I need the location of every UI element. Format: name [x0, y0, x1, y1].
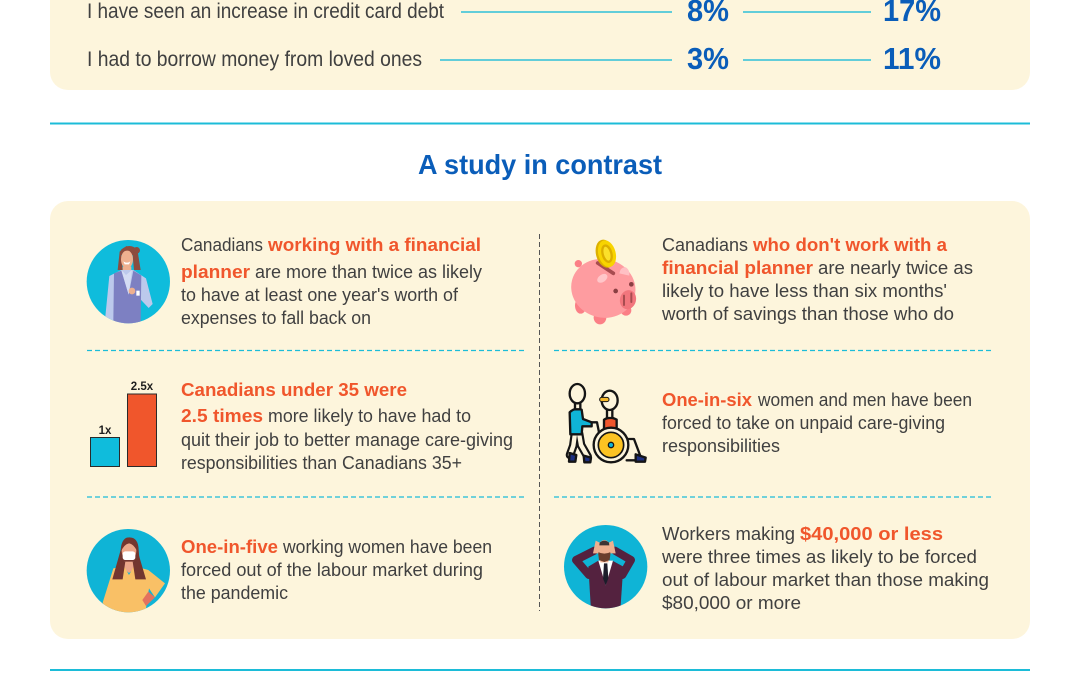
text: Canadians under 35: more likely to have had to — [268, 406, 471, 426]
text: Canadians under 35: quit their job to better manage care-giving — [181, 430, 513, 450]
text: workers making $40,000 or less — [661, 524, 989, 613]
survey row: borrowed from loved ones: I had to borrow money from loved ones — [87, 47, 422, 71]
icon: caregiver pushing wheelchair — [569, 384, 646, 462]
text: one-in-six caregivers: forced to take on unpaid care-giving — [662, 413, 945, 433]
text: who don't work with a financial planner: financial planner — [662, 258, 813, 278]
text: who don't work with a financial planner: who don't work with a — [752, 235, 948, 255]
text: who don't work with a financial planner — [661, 235, 973, 324]
icon: financial planner woman — [87, 240, 170, 324]
survey row: borrowed from loved ones — [87, 41, 941, 76]
text: one-in-six caregivers: responsibilities — [662, 436, 780, 456]
text: who don't work with a financial planner: worth of savings than those who do — [661, 304, 954, 324]
text: working with a financial planner — [181, 235, 482, 328]
text: Canadians under 35: responsibilities than Canadians 35+ — [181, 453, 462, 473]
chart: 1x versus 2.5x bars — [90, 381, 156, 466]
text: Canadians under 35 — [181, 380, 513, 473]
text: workers making $40,000 or less: Workers making — [662, 524, 795, 544]
text: one-in-five working women: working women have been — [282, 537, 492, 557]
text: workers making $40,000 or less: were three times as likely to be forced — [661, 547, 977, 567]
heading: A study in contrast: A study in contrast — [418, 149, 662, 180]
text: one-in-six caregivers: women and men have been — [757, 390, 972, 410]
chart: 1x versus 2.5x bars: 2.5x — [131, 381, 154, 393]
text: working with a financial planner: planner — [181, 262, 250, 282]
text: working with a financial planner: working with a financial — [267, 235, 481, 255]
text: workers making $40,000 or less: out of labour market than those making — [662, 570, 989, 590]
icon: woman wearing mask — [87, 529, 170, 615]
text: working with a financial planner: are more than twice as likely — [255, 262, 482, 282]
text: working with a financial planner: to have at least one year's worth of — [181, 285, 459, 305]
icon: stressed man in suit — [564, 525, 647, 610]
text: workers making $40,000 or less: $40,000 or less — [800, 524, 943, 544]
text: working with a financial planner: Canadians — [181, 235, 263, 255]
panel: study in contrast — [50, 201, 1030, 639]
text: Canadians under 35: Canadians under 35 were — [181, 380, 407, 400]
chart: 1x versus 2.5x bars: 1x — [99, 425, 112, 437]
icon: piggy bank with coin — [565, 237, 642, 325]
panel: debt survey results — [50, 0, 1030, 90]
survey row: borrowed from loved ones: 3% — [687, 41, 729, 76]
text: workers making $40,000 or less: $80,000 or more — [662, 593, 801, 613]
text: who don't work with a financial planner: are nearly twice as — [818, 258, 973, 278]
text: one-in-five working women: forced out of the labour market during — [181, 560, 483, 580]
text: one-in-six caregivers: One-in-six — [662, 390, 752, 410]
survey row: credit card debt — [87, 0, 941, 28]
text: one-in-five working women: the pandemic — [181, 583, 288, 603]
text: one-in-five working women — [181, 537, 492, 603]
text: one-in-five working women: One-in-five — [181, 537, 278, 557]
text: working with a financial planner: expenses to fall back on — [181, 308, 371, 328]
text: Canadians under 35: 2.5 times — [181, 406, 263, 426]
text: who don't work with a financial planner: likely to have less than six months' — [662, 281, 947, 301]
text: one-in-six caregivers — [662, 390, 972, 456]
text: who don't work with a financial planner: Canadians — [662, 235, 748, 255]
survey row: borrowed from loved ones: 11% — [883, 41, 941, 76]
